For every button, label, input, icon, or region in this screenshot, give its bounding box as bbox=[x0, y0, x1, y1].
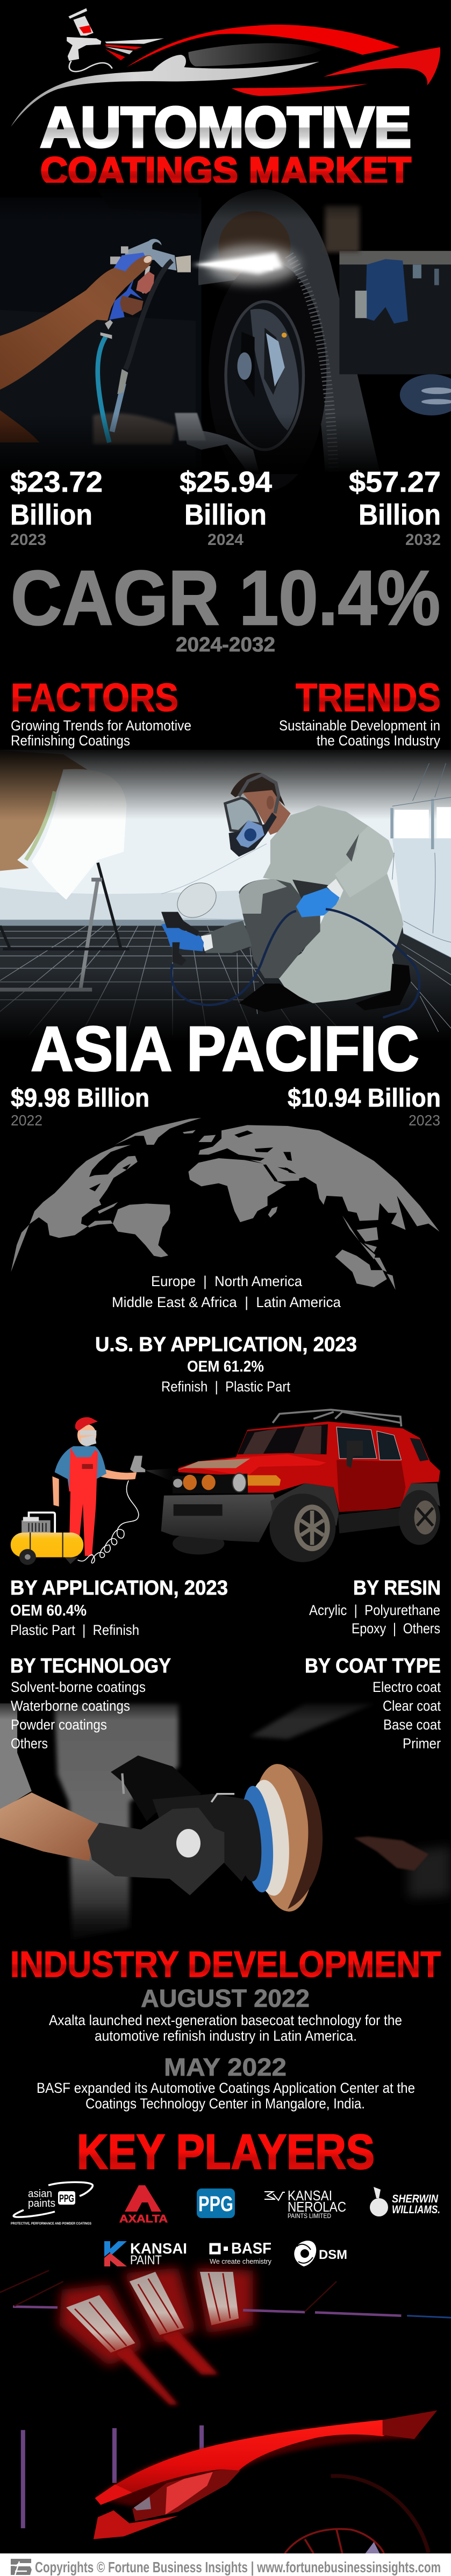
region value 2023 bbox=[288, 1084, 441, 1129]
tool neck bbox=[153, 1794, 259, 1882]
painter and booth detail bbox=[161, 763, 451, 1032]
rail blue end bbox=[407, 2316, 451, 2317]
by coat type panel bbox=[305, 1655, 441, 1752]
visor bbox=[225, 798, 261, 831]
side skirt bbox=[338, 1508, 401, 1533]
thigh shadow bbox=[239, 879, 320, 978]
logo: Kansai Nerolac: NEROLAC bbox=[288, 2199, 346, 2215]
world globe map bbox=[11, 1118, 440, 1290]
by technology panel: Solvent-borne coatings bbox=[11, 1679, 146, 1695]
globe cutouts bbox=[89, 1130, 296, 1192]
pad blue ring bbox=[238, 1785, 277, 1893]
logo: Kansai Nerolac: KANSAI bbox=[288, 2187, 332, 2204]
Africa bbox=[188, 1158, 286, 1222]
other regions line 2: Middle East & Africa | Latin America bbox=[112, 1294, 341, 1310]
SUV hood bbox=[198, 1454, 326, 1476]
right wall lines bbox=[392, 853, 451, 958]
right glow bbox=[409, 1846, 451, 1898]
compressor cap bbox=[23, 1517, 39, 1522]
shop background, right bbox=[325, 206, 451, 415]
hose fitting bbox=[117, 369, 128, 394]
icon: Fortune Business Insights logo bbox=[11, 2559, 32, 2575]
spray cone bbox=[145, 1468, 178, 1482]
mask filter bbox=[236, 820, 264, 848]
logo: BASF: We create chemistry bbox=[210, 2257, 271, 2265]
car lower sill bbox=[232, 84, 368, 96]
knee highlight bbox=[239, 879, 287, 914]
by coat type panel: Electro coat bbox=[373, 1679, 441, 1695]
spray gun and hand bbox=[0, 239, 206, 444]
Black Sea bbox=[255, 1147, 273, 1152]
tyre tread bbox=[289, 255, 334, 472]
faint ceiling beams bbox=[0, 2270, 337, 2312]
development: May 2022: Coatings Technology Center in Mangalore, India. bbox=[85, 2096, 365, 2112]
stat values panel bbox=[10, 466, 441, 549]
car tail bbox=[324, 47, 440, 85]
glove bbox=[88, 1807, 224, 1896]
development: August 2022: Axalta launched next-generation basecoat technology for the bbox=[49, 2012, 402, 2028]
face and neck bbox=[242, 790, 291, 835]
headlight right bbox=[232, 1473, 246, 1492]
by application panel: BY APPLICATION, 2023 bbox=[10, 1577, 228, 1599]
development: August 2022: AUGUST 2022 bbox=[141, 1984, 310, 2012]
tool handle highlight bbox=[122, 1773, 124, 1794]
spray jet bbox=[191, 252, 283, 274]
indicator bbox=[247, 1475, 281, 1486]
car body glow bbox=[95, 2421, 423, 2506]
logo: Kansai Paint: KANSAI bbox=[130, 2240, 187, 2257]
stat 2023: 2023 bbox=[10, 531, 46, 549]
ceiling rails bbox=[13, 2307, 401, 2316]
sleeve bbox=[335, 826, 394, 898]
stat 2024: Billion bbox=[184, 499, 267, 531]
by application panel: OEM 60.4% bbox=[10, 1602, 87, 1619]
grey hose bbox=[112, 383, 124, 432]
lamp panel 3 bbox=[200, 2272, 239, 2326]
wheel arch bbox=[331, 2476, 428, 2553]
logo: Axalta: AXALTA bbox=[119, 2213, 168, 2225]
stat 2032: $57.27 bbox=[349, 466, 441, 498]
photo: red lit car in booth bbox=[0, 2268, 451, 2553]
Greenland bbox=[115, 1118, 202, 1145]
fender arch bbox=[198, 189, 380, 472]
booth fade top bbox=[0, 746, 451, 820]
lamp panel 2 bbox=[130, 2272, 184, 2335]
logo: car with spray gun bbox=[11, 8, 440, 127]
photo: orbital polisher bbox=[0, 1703, 451, 1939]
booth wall bbox=[0, 750, 451, 927]
region value 2022: 2022 bbox=[11, 1112, 42, 1129]
compressor tank bbox=[11, 1533, 83, 1557]
factors text: Growing Trends for Automotive bbox=[11, 717, 191, 734]
front rim bbox=[294, 1504, 330, 1551]
region value 2023: $10.94 Billion bbox=[288, 1084, 441, 1113]
factors text: Refinishing Coatings bbox=[11, 733, 130, 749]
hand spray gun bbox=[130, 1456, 145, 1472]
SUV body bbox=[178, 1422, 440, 1512]
region heading: ASIA PACIFIC bbox=[31, 1014, 419, 1085]
lamp streaks bbox=[115, 2331, 219, 2405]
lower wall tint bbox=[0, 887, 259, 925]
stand foot bbox=[0, 880, 102, 989]
filter centre bbox=[244, 828, 256, 841]
thumb nail bbox=[142, 254, 153, 264]
wheel arch bbox=[270, 1483, 339, 1526]
front tyre bbox=[269, 1494, 335, 1562]
logo: Sherwin Williams: WILLIAMS. bbox=[392, 2204, 440, 2216]
logo: Asian Paints PPG: asian bbox=[28, 2188, 52, 2200]
development: May 2022: BASF expanded its Automotive Coatings Application Center at the bbox=[37, 2080, 415, 2096]
car nose bbox=[95, 2484, 132, 2505]
rear window bbox=[410, 1438, 428, 1461]
stat 2032 bbox=[349, 466, 441, 549]
tyre bbox=[209, 261, 326, 491]
U.S. OEM share: OEM 61.2% bbox=[187, 1358, 264, 1375]
by technology panel: Powder coatings bbox=[11, 1717, 107, 1733]
Red Sea bbox=[263, 1165, 277, 1181]
stat 2032: Billion bbox=[359, 499, 441, 531]
side window front bbox=[337, 1427, 377, 1459]
stat 2023 bbox=[10, 466, 103, 549]
spray gun bbox=[161, 912, 199, 936]
sleeve bbox=[0, 1703, 32, 1810]
region value 2022: $9.98 Billion bbox=[11, 1084, 149, 1113]
trends text bbox=[279, 717, 440, 749]
development: May 2022: MAY 2022 bbox=[164, 2053, 287, 2081]
region value 2023: 2023 bbox=[409, 1112, 440, 1129]
boot bbox=[355, 964, 411, 1010]
knob bbox=[176, 1829, 201, 1857]
Madagascar bbox=[268, 1207, 277, 1218]
masking tape bbox=[26, 791, 55, 860]
logo: DSM: DSM bbox=[319, 2248, 347, 2262]
worker legs bbox=[69, 1490, 96, 1556]
car bumper bbox=[94, 2510, 178, 2539]
cuff left bbox=[201, 934, 213, 951]
worker left arm bbox=[52, 1476, 59, 1506]
key players heading: KEY PLAYERS bbox=[77, 2125, 375, 2179]
wheel well bbox=[219, 211, 290, 283]
Iceland bbox=[183, 1130, 196, 1133]
lit wheel lower bbox=[184, 430, 259, 472]
lamp reflectors bbox=[75, 2273, 230, 2350]
by coat type panel: BY COAT TYPE bbox=[305, 1655, 441, 1677]
hair bbox=[231, 773, 285, 806]
glove fingers over knob bbox=[202, 1829, 224, 1860]
forearm lower bbox=[0, 410, 39, 442]
CAGR period: 2024-2032 bbox=[176, 634, 275, 656]
by coat type panel: Clear coat bbox=[383, 1698, 441, 1714]
paint cup bbox=[170, 876, 223, 924]
roof rack bbox=[273, 1410, 401, 1426]
bright window left bbox=[395, 810, 429, 838]
photo: painter in booth bbox=[0, 750, 451, 1041]
waist shadow bbox=[292, 880, 339, 908]
by technology panel bbox=[10, 1655, 171, 1752]
arm and palm bbox=[0, 255, 152, 390]
cap bbox=[75, 1417, 98, 1431]
by technology panel: BY TECHNOLOGY bbox=[10, 1655, 171, 1677]
logo: BASF bbox=[210, 2240, 271, 2265]
by application panel: Plastic Part | Refinish bbox=[10, 1622, 139, 1638]
logo: Asian Paints PPG bbox=[11, 2182, 92, 2226]
logo: BASF: BASF bbox=[231, 2240, 271, 2257]
stat 2024 bbox=[180, 466, 272, 549]
title: automotive: AUTOMOTIVE bbox=[40, 96, 411, 159]
logo: DSM bbox=[294, 2241, 347, 2266]
blurred car reflection bbox=[93, 413, 176, 444]
rear tyre bbox=[399, 1490, 440, 1545]
goggles and mask bbox=[80, 1430, 96, 1446]
compressor handle bbox=[29, 1512, 55, 1533]
SUV door bbox=[337, 1460, 405, 1512]
development: August 2022 bbox=[49, 1984, 402, 2044]
SUV front-left tyre bbox=[173, 1533, 224, 1554]
shirt bbox=[55, 1446, 106, 1491]
background shelf shape bbox=[250, 1703, 374, 1739]
Baltic bbox=[234, 1130, 253, 1138]
Caspian bbox=[283, 1152, 292, 1161]
photo: wheel and shop backdrop bbox=[0, 186, 451, 491]
Central America bbox=[88, 1202, 118, 1228]
wheel spokes bbox=[285, 2529, 384, 2553]
Persian Gulf bbox=[285, 1167, 296, 1174]
side window rear bbox=[377, 1431, 401, 1460]
illustration: worker spraying SUV bbox=[11, 1410, 440, 1565]
glove left bbox=[161, 923, 204, 951]
factors text bbox=[11, 717, 191, 749]
car headlight bbox=[132, 2469, 240, 2521]
backing bbox=[233, 1798, 264, 1883]
logo: Sherwin Williams: SHERWIN bbox=[392, 2193, 439, 2205]
gun nozzle bbox=[176, 255, 191, 272]
polisher fade bottom bbox=[0, 1903, 269, 1956]
stat 2032: 2032 bbox=[405, 531, 441, 549]
coiled hose bbox=[77, 1481, 139, 1563]
trends text: the Coatings Industry bbox=[317, 733, 440, 749]
upper plastic lines bbox=[392, 763, 451, 806]
Mediterranean bbox=[209, 1149, 264, 1161]
glove right bbox=[296, 888, 340, 917]
car panel bbox=[32, 769, 126, 900]
development: August 2022: automotive refinish industry in Latin America. bbox=[95, 2028, 357, 2044]
bumper grille bbox=[174, 1504, 223, 1516]
footer bar bbox=[0, 2553, 451, 2576]
car hood highlight bbox=[115, 2410, 437, 2493]
gun blue body bbox=[113, 253, 145, 272]
U.S. application heading: U.S. BY APPLICATION, 2023 bbox=[95, 1333, 357, 1356]
North America bbox=[11, 1145, 138, 1272]
fog lamps bbox=[183, 1475, 197, 1490]
wheel highlight bbox=[366, 2542, 380, 2553]
worker right arm bbox=[99, 1468, 137, 1480]
right plastic wall bbox=[392, 838, 451, 958]
rim bbox=[226, 302, 304, 450]
title: coatings market: COATINGS MARKET bbox=[40, 150, 411, 193]
knee shadow bbox=[239, 984, 309, 1012]
region value 2022 bbox=[11, 1084, 149, 1129]
UK bbox=[198, 1135, 216, 1142]
car window bbox=[188, 43, 321, 66]
headlight glint bbox=[166, 2472, 213, 2515]
Eurasia bbox=[198, 1125, 440, 1232]
spray halo bbox=[207, 246, 299, 284]
mask lower bbox=[228, 813, 277, 857]
tool bracket bbox=[211, 1794, 234, 1802]
by technology panel: Waterborne coatings bbox=[11, 1698, 130, 1714]
wall folds bbox=[161, 844, 267, 921]
cuff right bbox=[327, 879, 343, 899]
by coat type panel: Base coat bbox=[383, 1717, 441, 1733]
motor fins bbox=[29, 1523, 46, 1532]
stat 2023: $23.72 bbox=[10, 466, 103, 498]
stat 2023: Billion bbox=[10, 499, 92, 531]
rear rim bbox=[414, 1501, 436, 1534]
U.S. other segments: Refinish | Plastic Part bbox=[161, 1379, 290, 1395]
panel stand bbox=[81, 879, 98, 989]
rear arch bbox=[400, 1483, 440, 1506]
stat 2024: 2024 bbox=[207, 531, 244, 549]
SUV hood scoop bbox=[175, 1459, 250, 1471]
pad white ring bbox=[244, 1778, 293, 1897]
other regions line 1: Europe | North America bbox=[151, 1273, 303, 1289]
mirror bbox=[347, 1441, 363, 1468]
mask straps bbox=[239, 775, 278, 813]
forearm bbox=[0, 1792, 98, 1861]
logo: PPG bbox=[197, 2188, 235, 2218]
teal hose bbox=[98, 337, 109, 442]
floor grid near painter bbox=[237, 939, 451, 1032]
headlight left bbox=[173, 1479, 182, 1488]
logo: Kansai Nerolac bbox=[264, 2187, 346, 2220]
development: May 2022 bbox=[37, 2053, 415, 2112]
bumper bbox=[161, 1494, 277, 1542]
windshield reflection bbox=[243, 1426, 321, 1454]
spray core bbox=[196, 256, 273, 270]
factors heading: FACTORS bbox=[11, 676, 178, 720]
logo: Kansai Paint: PAINT bbox=[130, 2253, 162, 2268]
car body silver swoosh bbox=[11, 55, 319, 127]
upper fingers bbox=[136, 271, 154, 294]
lower bright panel bbox=[175, 413, 206, 441]
masking paper bbox=[0, 750, 98, 871]
trigger bbox=[141, 266, 151, 294]
wall base shadow bbox=[0, 920, 245, 925]
compressor motor bbox=[22, 1520, 51, 1533]
floor grid bbox=[0, 925, 345, 1036]
by coat type panel: Primer bbox=[403, 1735, 441, 1752]
worker boot bbox=[65, 1557, 77, 1564]
lamp glow bbox=[59, 2268, 253, 2366]
gun regulator bbox=[173, 942, 186, 966]
polisher fade top bbox=[0, 1698, 451, 1720]
logo: Kansai Nerolac: PAINTS LIMITED bbox=[288, 2212, 331, 2220]
car side background bbox=[0, 197, 202, 472]
logo: Asian Paints PPG: paints bbox=[28, 2198, 55, 2209]
armpit shadow bbox=[346, 834, 359, 862]
stat 2024: $25.94 bbox=[180, 466, 272, 498]
tank band bbox=[30, 1533, 63, 1557]
logo: Sherwin Williams bbox=[370, 2187, 440, 2216]
logo: Kansai Paint bbox=[104, 2240, 187, 2268]
left arm bbox=[203, 921, 252, 953]
compressor wheel bbox=[19, 1549, 36, 1565]
overalls bbox=[69, 1447, 98, 1491]
SUV windshield bbox=[237, 1424, 328, 1454]
hose clamp bbox=[101, 320, 113, 339]
logo: PPG: PPG bbox=[198, 2192, 233, 2216]
logo: Axalta bbox=[119, 2185, 168, 2225]
gun grip bbox=[109, 278, 142, 320]
by resin panel bbox=[309, 1577, 441, 1637]
pocket bbox=[82, 1464, 93, 1469]
dim right hand bbox=[354, 1836, 428, 1871]
blurred background bbox=[55, 1703, 178, 1939]
air hose bbox=[171, 909, 419, 1017]
suit body and leg bbox=[263, 805, 403, 1003]
by resin panel: BY RESIN bbox=[353, 1577, 441, 1599]
face bbox=[77, 1424, 96, 1446]
Australia bbox=[335, 1250, 387, 1287]
grille bbox=[173, 1474, 248, 1494]
window posts bbox=[392, 799, 433, 849]
gun silver head bbox=[124, 239, 176, 270]
pad foam bbox=[247, 1761, 320, 1914]
by application panel bbox=[10, 1577, 228, 1638]
fingers bbox=[120, 296, 144, 315]
floor fade bottom bbox=[0, 967, 451, 1043]
car roof swoosh bbox=[126, 25, 400, 67]
South America bbox=[113, 1203, 170, 1257]
ear bbox=[267, 796, 274, 809]
booth floor bbox=[0, 925, 451, 1041]
tool rear body bbox=[111, 1755, 202, 1821]
Southeast Asia islands bbox=[342, 1216, 396, 1290]
pad dark side bbox=[288, 1767, 323, 1909]
Great Lakes bbox=[89, 1164, 131, 1192]
hero fade top bbox=[0, 183, 451, 220]
headlight inner bbox=[134, 2496, 151, 2510]
by technology panel: Others bbox=[11, 1735, 48, 1752]
icon: spray gun bbox=[67, 8, 164, 71]
rear knobs bbox=[110, 246, 128, 264]
stand rear leg bbox=[0, 863, 130, 949]
logo: Asian Paints PPG: PROTECTIVE, PERFORMANCE AND POWDER COATINGS bbox=[11, 2222, 91, 2226]
lamp panel 1 bbox=[66, 2295, 135, 2353]
logo: Asian Paints PPG: PPG bbox=[59, 2193, 74, 2205]
black hose bbox=[125, 261, 172, 369]
car hood tail bbox=[383, 2410, 437, 2439]
bright window right bbox=[436, 807, 451, 838]
hero fade bottom bbox=[0, 414, 451, 474]
wall tube lights bbox=[23, 2426, 202, 2528]
